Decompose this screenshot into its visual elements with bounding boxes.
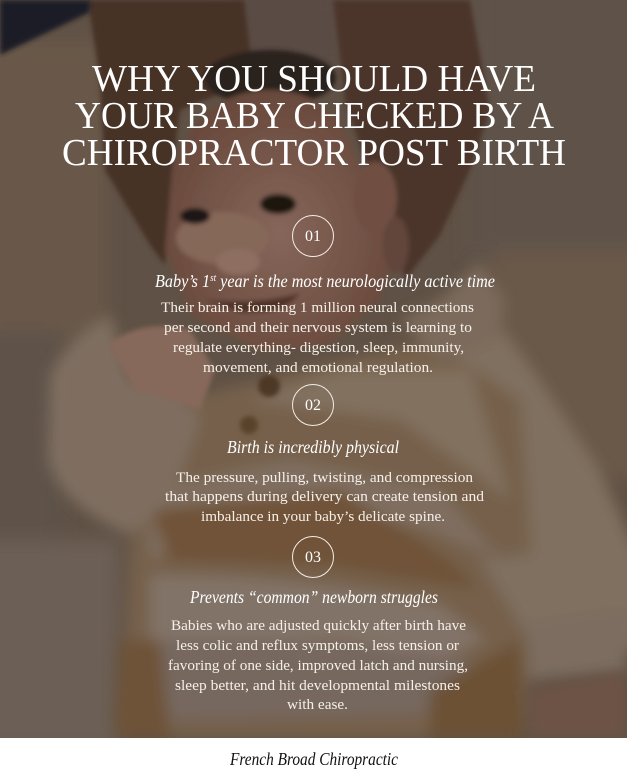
body 03: sleep better, and hit developmental milestones — [175, 678, 460, 694]
title: WHY YOU SHOULD HAVE — [92, 58, 536, 100]
buttons — [258, 375, 280, 397]
section 02 — [165, 384, 485, 525]
thumb — [362, 160, 399, 225]
body 02: imbalance in your baby’s delicate spine. — [201, 509, 445, 525]
number badge 02: 02 — [305, 397, 321, 414]
dark corner — [0, 0, 90, 55]
ear — [383, 217, 409, 273]
heading 02: Birth is incredibly physical — [227, 437, 399, 457]
body 03: with ease. — [287, 697, 348, 713]
face — [165, 90, 395, 350]
nose — [216, 254, 260, 276]
number badge 01 — [292, 216, 334, 256]
body 02: that happens during delivery can create tension and — [165, 489, 485, 505]
left hand — [88, 0, 250, 265]
body 03: less colic and reflux symptoms, less tension or — [176, 638, 459, 654]
hair — [204, 50, 336, 106]
footer brand name: French Broad Chiropractic — [229, 749, 398, 769]
body 01: regulate everything- digestion, sleep, immunity, — [173, 340, 464, 356]
title — [62, 58, 566, 174]
fist — [108, 326, 215, 410]
title: YOUR BABY CHECKED BY A — [75, 95, 555, 137]
mouth — [205, 293, 300, 312]
right sleeve cuff — [483, 552, 536, 627]
footer band — [0, 738, 627, 784]
heading 01: Baby’s 1 — [155, 271, 216, 291]
section 01 — [155, 216, 495, 376]
body 03: favoring of one side, improved latch and nursing, — [168, 658, 468, 674]
section 03 — [168, 536, 468, 713]
body 01 — [161, 300, 474, 376]
collar right — [400, 262, 505, 360]
body 01: movement, and emotional regulation. — [203, 360, 433, 376]
body 02: The pressure, pulling, twisting, and compression — [176, 470, 474, 486]
right hand — [333, 0, 490, 280]
eyes — [180, 208, 210, 224]
number badge 03: 03 — [305, 549, 321, 566]
heading 01: year is the most neurologically active time — [216, 271, 495, 291]
brown shadow — [150, 490, 480, 590]
arm/sleeve right — [456, 332, 627, 650]
body 01: Their brain is forming 1 million neural connections — [161, 300, 474, 316]
number badge 01: 01 — [305, 228, 321, 245]
lower light fold — [150, 575, 485, 660]
body 03: Babies who are adjusted quickly after birth have — [171, 618, 466, 634]
title: CHIROPRACTOR POST BIRTH — [62, 132, 566, 174]
hand bottom right — [532, 680, 626, 738]
cheek highlight — [175, 212, 255, 264]
heading 01: st — [210, 273, 216, 284]
left sleeve — [48, 315, 200, 535]
heading 03: Prevents “common” newborn struggles — [189, 587, 438, 607]
body 03 — [168, 618, 468, 713]
number badge 03 — [292, 536, 334, 578]
number badge 02 — [292, 384, 334, 426]
torso — [120, 340, 535, 738]
body 02 — [165, 470, 485, 525]
body 01: per second and their nervous system is learning to — [164, 320, 472, 336]
